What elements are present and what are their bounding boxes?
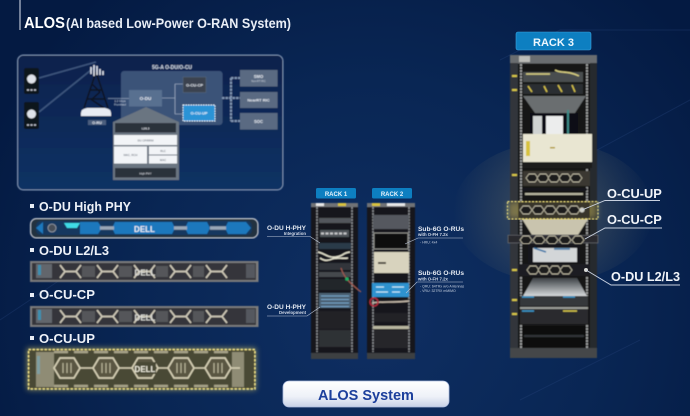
protocol stack: DU CP/RRM — [138, 138, 154, 142]
panel: O-DU and O-CU group: Fronthaul — [114, 102, 126, 106]
callout: O-DU H-PHY Development: Development — [279, 310, 307, 315]
icon: user phones — [24, 62, 96, 129]
callout: Sub-6G O-RUs QRU VRU: Sub-6G O-RUs — [418, 270, 464, 277]
protocol stack: MAC — [160, 158, 166, 162]
title: (AI based Low-Power O-RAN System) — [66, 15, 291, 31]
protocol stack: High PHY — [139, 172, 152, 176]
callout: Sub-6G O-RUs QRU VRU: with O-FH 7.2x — [417, 276, 448, 282]
highlighted O-CU-UP unit — [508, 202, 598, 219]
button: RACK 3 — [516, 32, 591, 50]
server: O-DU High PHY — [30, 218, 258, 238]
callout: O-DU L2/L3: O-DU L2/L3 — [611, 269, 680, 284]
server: O-DU High PHY: DELL — [134, 225, 155, 234]
callout: O-DU H-PHY Integration: Integration — [284, 231, 306, 236]
callout: Sub-6G O-RUs QRU VRU: - VRU: 32TRX mMIMO — [420, 289, 456, 293]
panel: O-DU and O-CU group: O-CU-UP — [190, 110, 208, 116]
button: RACK 1: RACK 1 — [325, 192, 348, 198]
box: SOC: SOC — [254, 119, 263, 124]
box: SMO — [240, 70, 278, 86]
server: O-CU-UP highlighted — [27, 348, 256, 390]
glow behind rack 3 highlight — [453, 142, 653, 282]
server: O-DU L2/L3: DELL — [135, 268, 156, 278]
title — [20, 0, 291, 32]
panel: O-DU and O-CU group: O-DU — [140, 96, 152, 101]
heading: O-DU L2/L3: O-DU L2/L3 — [39, 243, 109, 258]
icon: radio tower: O-RU — [92, 121, 102, 125]
O-CU-CP unit — [508, 235, 598, 244]
callout: O-CU-CP: O-CU-CP — [607, 212, 662, 227]
callout: O-DU H-PHY Integration: O-DU H-PHY — [267, 225, 307, 232]
callout: O-CU-UP: O-CU-UP — [607, 186, 662, 201]
button: ALOS System — [283, 381, 449, 407]
protocol stack: L2/L3 — [142, 126, 150, 130]
heading: O-CU-UP: O-CU-UP — [39, 331, 95, 346]
server: O-CU-UP highlighted: DELL — [135, 365, 156, 374]
button: ALOS System: ALOS System — [318, 388, 414, 404]
panel: O-DU and O-CU group: O-CU-CP — [186, 82, 203, 88]
box: Near-RT RIC: NearRT RIC — [247, 98, 270, 102]
box: SOC — [240, 113, 278, 130]
heading: O-CU-CP: O-CU-CP — [39, 287, 95, 302]
button: RACK 2 — [372, 188, 412, 198]
protocol stack: MAC, RCH — [124, 153, 137, 157]
rack 1 — [311, 203, 361, 359]
heading: 5G-A O-DU/O-CU: 5G-A O-DU/O-CU — [152, 65, 192, 71]
panel: architecture diagram — [18, 55, 283, 190]
title: ALOS — [24, 15, 65, 32]
rack 3 — [508, 55, 598, 358]
callout: Sub-6G O-RUs HRU — [405, 226, 464, 244]
server: O-DU L2/L3 — [30, 261, 258, 282]
connectors to SMO, Near-RT RIC and SOC — [222, 78, 240, 121]
callout: O-DU H-PHY Development: O-DU H-PHY — [267, 304, 307, 311]
callout: O-DU H-PHY Integration — [267, 225, 320, 243]
server: O-CU-CP: DELL — [135, 314, 156, 322]
box: SMO: SMO — [254, 74, 264, 79]
callout: Sub-6G O-RUs HRU: - HRU: 4x4 — [420, 240, 437, 244]
box: SMO: Non-RT RIC — [251, 79, 266, 83]
server: O-CU-CP — [30, 306, 258, 327]
box: Near-RT RIC — [240, 92, 278, 108]
rack 2 — [367, 203, 415, 359]
callout: Sub-6G O-RUs HRU: Sub-6G O-RUs — [418, 226, 464, 233]
button: RACK 2: RACK 2 — [381, 192, 404, 198]
panel: O-DU and O-CU group: 1.2 Gbps — [114, 99, 126, 103]
callout: O-DU H-PHY Development — [267, 304, 320, 316]
panel: O-DU and O-CU group — [108, 71, 222, 125]
callout: Sub-6G O-RUs QRU VRU: - QRU: 64TRx w/o Antennas — [420, 284, 464, 288]
button: RACK 3: RACK 3 — [533, 37, 574, 49]
callout: O-DU L2/L3 — [584, 268, 680, 285]
icon: radio tower — [81, 65, 111, 125]
button: RACK 1 — [316, 188, 356, 198]
protocol stack: RLC — [160, 149, 166, 153]
protocol stack — [113, 107, 179, 180]
callout: O-CU-CP — [585, 212, 662, 239]
callout: Sub-6G O-RUs QRU VRU — [406, 270, 464, 293]
callout: Sub-6G O-RUs HRU: with O-FH 7.2x — [417, 232, 448, 237]
callout: O-CU-UP — [582, 186, 662, 210]
heading: O-DU High PHY: O-DU High PHY — [39, 199, 131, 214]
